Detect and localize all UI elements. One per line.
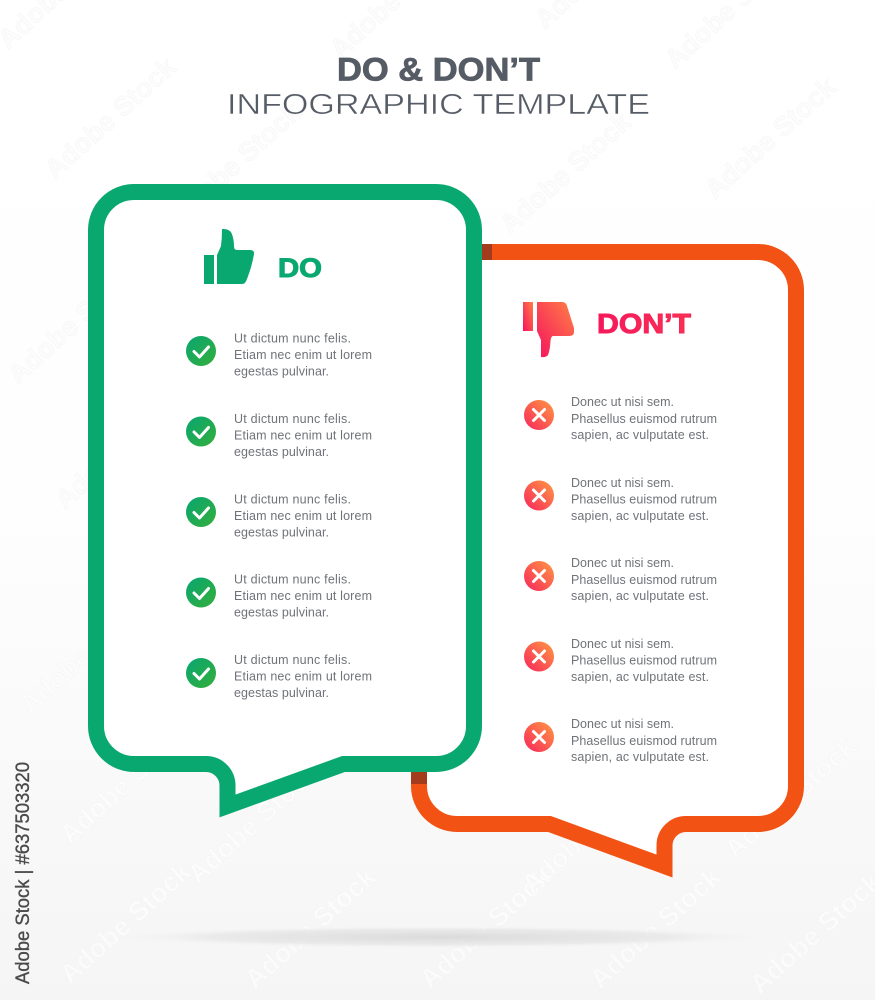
do item 1: egestas pulvinar.: [234, 364, 329, 378]
icon: thumbs up: [204, 229, 254, 284]
do speech bubble: [96, 192, 474, 806]
do heading: DO: [278, 253, 322, 283]
do item 4: Ut dictum nunc felis.: [234, 572, 351, 586]
text: Adobe Stock: [239, 861, 382, 994]
don't item 4: [524, 637, 717, 684]
do item 1: Ut dictum nunc felis.: [234, 332, 351, 346]
stock image credit: Adobe Stock | #637503320: [13, 762, 34, 984]
don't item 2: Donec ut nisi sem.: [571, 476, 674, 490]
don't item 3: Phasellus euismod rutrum: [571, 573, 717, 587]
don't item 3: [524, 556, 717, 603]
do item 5: Ut dictum nunc felis.: [234, 653, 351, 667]
text: Adobe Stock: [182, 756, 325, 889]
do item 3: Ut dictum nunc felis.: [234, 492, 351, 506]
text: Adobe Stock: [494, 106, 637, 239]
do item 1: [186, 332, 372, 378]
don't speech bubble: [419, 252, 796, 866]
don't item 5: Donec ut nisi sem.: [571, 717, 674, 731]
do item 2: Etiam nec enim ut lorem: [234, 428, 372, 442]
panel: don't: [411, 244, 796, 866]
do item 3: egestas pulvinar.: [234, 526, 329, 540]
don't item 3: Donec ut nisi sem.: [571, 556, 674, 570]
text: Adobe Stock: [699, 71, 842, 204]
do item 4: Etiam nec enim ut lorem: [234, 589, 372, 603]
do item 5: egestas pulvinar.: [234, 686, 329, 700]
overlap shade bottom: [411, 770, 427, 784]
do item 2: Ut dictum nunc felis.: [234, 412, 351, 426]
do item 2: egestas pulvinar.: [234, 445, 329, 459]
do item 4: [186, 572, 372, 620]
text: Adobe Stock: [14, 586, 157, 719]
panel: do: [96, 192, 474, 806]
text: Adobe Stock: [54, 716, 197, 849]
don't item 1: [524, 395, 717, 442]
title: INFOGRAPHIC TEMPLATE: [227, 89, 650, 121]
do item 5: Etiam nec enim ut lorem: [234, 670, 372, 684]
don't item 2: [524, 476, 717, 523]
text: Adobe Stock: [516, 766, 659, 899]
do item 1: Etiam nec enim ut lorem: [234, 348, 372, 362]
don't item 5: [524, 717, 717, 764]
title: [227, 52, 650, 121]
don't item 1: Donec ut nisi sem.: [571, 395, 674, 409]
don't heading: DON’T: [597, 308, 691, 339]
don't item 1: Phasellus euismod rutrum: [571, 412, 717, 426]
do item 5: [186, 653, 372, 700]
don't item 2: Phasellus euismod rutrum: [571, 492, 717, 506]
icon: thumbs down: [523, 302, 574, 357]
don't item 4: Phasellus euismod rutrum: [571, 654, 717, 668]
don't item 4: Donec ut nisi sem.: [571, 637, 674, 651]
text: Adobe Stock: [164, 96, 307, 229]
don't item 5: Phasellus euismod rutrum: [571, 734, 717, 748]
don't item 1: sapien, ac vulputate est.: [571, 428, 709, 442]
text: Adobe Stock: [414, 861, 557, 994]
don't item 5: sapien, ac vulputate est.: [571, 750, 709, 764]
ground shadow: [115, 926, 765, 948]
text: Adobe Stock: [2, 256, 145, 389]
do item 4: egestas pulvinar.: [234, 606, 329, 620]
don't item 4: sapien, ac vulputate est.: [571, 670, 709, 684]
overlap shade top: [480, 244, 492, 260]
text: Adobe Stock: [54, 856, 197, 989]
do item 2: [186, 412, 372, 459]
text: Adobe Stock: [584, 861, 727, 994]
don't item 3: sapien, ac vulputate est.: [571, 589, 709, 603]
do item 3: [186, 492, 372, 540]
title: DO & DON’T: [337, 52, 540, 88]
text: Adobe Stock: [49, 381, 192, 514]
text: Adobe Stock: [719, 731, 862, 864]
don't item 2: sapien, ac vulputate est.: [571, 509, 709, 523]
do item 3: Etiam nec enim ut lorem: [234, 509, 372, 523]
text: Adobe Stock: [39, 51, 182, 184]
